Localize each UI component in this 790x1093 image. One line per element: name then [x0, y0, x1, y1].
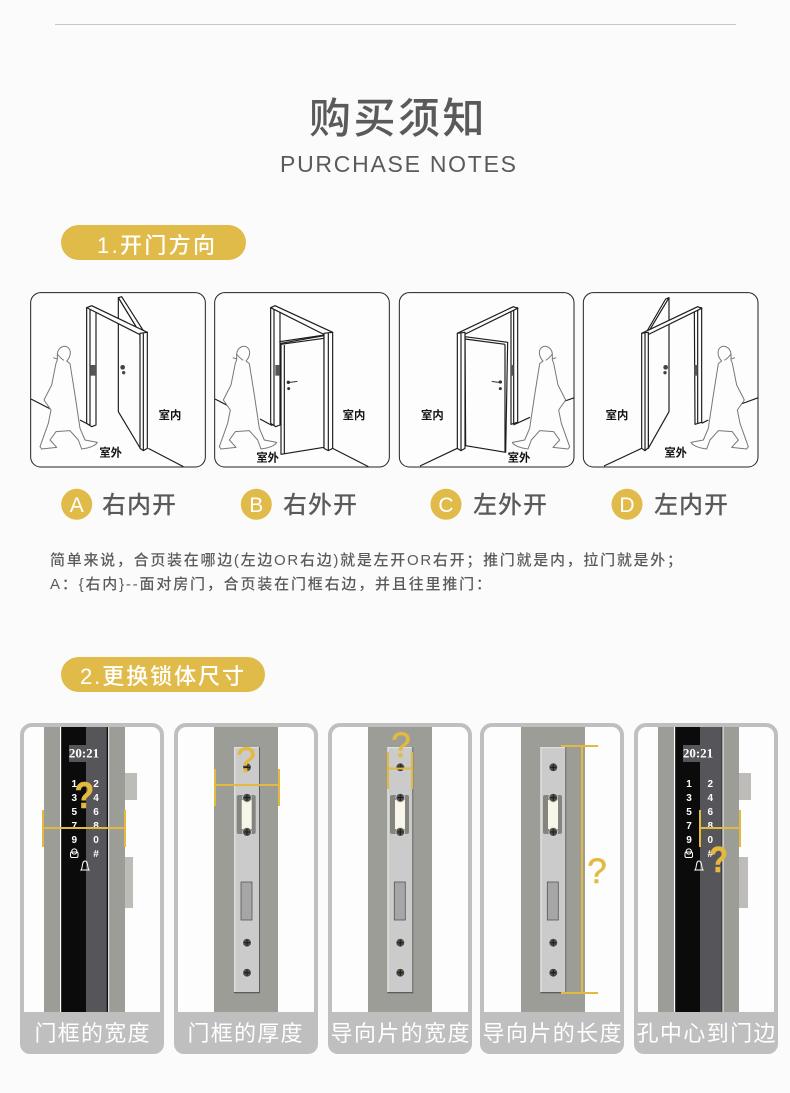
question mark: ?	[587, 852, 607, 891]
lock keypad: 3	[72, 793, 78, 804]
lock keypad: 2	[93, 779, 99, 790]
title: 购买须知	[309, 95, 487, 142]
lock keypad: 8	[93, 821, 99, 832]
lock keypad: 7	[686, 821, 692, 832]
section heading: lock body size	[61, 657, 265, 692]
lock keypad: 2	[708, 779, 714, 790]
panel: door B, right outward: 室内	[343, 408, 365, 422]
lock keypad: 9	[72, 835, 78, 846]
option A label	[61, 489, 176, 520]
lock keypad: 7	[72, 821, 78, 832]
caption: 门框的厚度	[188, 1021, 302, 1046]
strike plate	[540, 747, 566, 993]
section heading: door direction	[61, 225, 246, 260]
panel: door frame thickness	[174, 725, 318, 1054]
caption: 导向片的宽度	[330, 1021, 470, 1046]
lock keypad	[70, 779, 99, 870]
option A label: A	[70, 494, 84, 517]
lock keypad: 1	[686, 779, 692, 790]
section heading: door direction: 1.开门方向	[97, 233, 215, 258]
width measure line	[388, 752, 412, 789]
edge distance measure line	[700, 810, 740, 847]
lock keypad: 0	[93, 835, 99, 846]
panel: door A, right inward	[31, 293, 205, 467]
panel: door D, left inward	[583, 293, 758, 467]
strike plate	[387, 747, 413, 993]
lock keypad: 6	[708, 807, 714, 818]
lock keypad: 1	[72, 779, 78, 790]
lock keypad	[685, 779, 714, 870]
lock screen clock: 20:21	[683, 746, 713, 760]
lock keypad: 4	[708, 793, 714, 804]
thickness measure line	[215, 769, 279, 806]
question mark: ?	[75, 776, 94, 817]
section heading: lock body size: 2.更换锁体尺寸	[80, 664, 244, 689]
question mark: ?	[236, 741, 256, 780]
option B label	[241, 489, 357, 520]
lock keypad: #	[708, 849, 714, 860]
lock keypad: #	[93, 849, 99, 860]
caption	[480, 1012, 624, 1054]
option B label: 右外开	[283, 492, 357, 519]
explanation text: A：{右内}--面对房门，合页装在门框右边，并且往里推门：	[50, 575, 491, 593]
panel: door C, left outward: 室外	[508, 450, 531, 464]
question mark: ?	[391, 726, 411, 765]
panel: hole center to door edge	[634, 725, 778, 1054]
caption	[328, 1012, 472, 1054]
caption: 导向片的长度	[482, 1021, 622, 1046]
caption	[634, 1012, 778, 1054]
length measure line	[561, 746, 598, 993]
caption	[20, 1012, 164, 1054]
option D label: D	[619, 494, 635, 517]
panel: door B, right outward: 室外	[256, 450, 280, 464]
lock keypad: 4	[93, 793, 99, 804]
width measure line	[43, 810, 126, 847]
question mark: ?	[709, 841, 728, 881]
panel: door C, left outward: 室内	[421, 408, 444, 422]
lock keypad: 6	[93, 807, 99, 818]
caption: 孔中心到门边	[636, 1021, 776, 1046]
option D label: 左内开	[654, 492, 728, 519]
panel: door frame width	[20, 725, 164, 1054]
lock keypad: 9	[686, 835, 692, 846]
panel: guide plate length	[480, 725, 624, 1054]
lock screen clock: 20:21	[69, 746, 99, 760]
lock keypad: 3	[686, 793, 692, 804]
caption	[174, 1012, 318, 1054]
panel: door D, left inward: 室外	[664, 445, 688, 459]
lock keypad: 5	[686, 807, 692, 818]
explanation text: 简单来说，合页装在哪边(左边OR右边)就是左开OR右开；推门就是内，拉门就是外；	[50, 551, 682, 569]
caption: 门框的宽度	[34, 1021, 150, 1046]
panel: door C, left outward	[399, 293, 574, 467]
lock keypad: 0	[708, 835, 714, 846]
panel: door A, right inward: 室外	[99, 445, 123, 459]
option C label: 左外开	[473, 492, 547, 519]
panel: door A, right inward: 室内	[159, 408, 181, 422]
panel: guide plate width	[328, 725, 472, 1054]
subtitle: PURCHASE NOTES	[280, 151, 516, 177]
option A label: 右内开	[102, 492, 176, 519]
option C label: C	[438, 494, 454, 517]
lock keypad: 8	[708, 821, 714, 832]
explanation text	[50, 551, 682, 593]
panel: door D, left inward: 室内	[606, 408, 628, 422]
option D label	[612, 489, 728, 520]
strike plate	[234, 747, 260, 993]
panel: door B, right outward	[215, 293, 389, 467]
option B label: B	[249, 494, 263, 517]
lock keypad: 5	[72, 807, 78, 818]
option C label	[430, 489, 547, 520]
